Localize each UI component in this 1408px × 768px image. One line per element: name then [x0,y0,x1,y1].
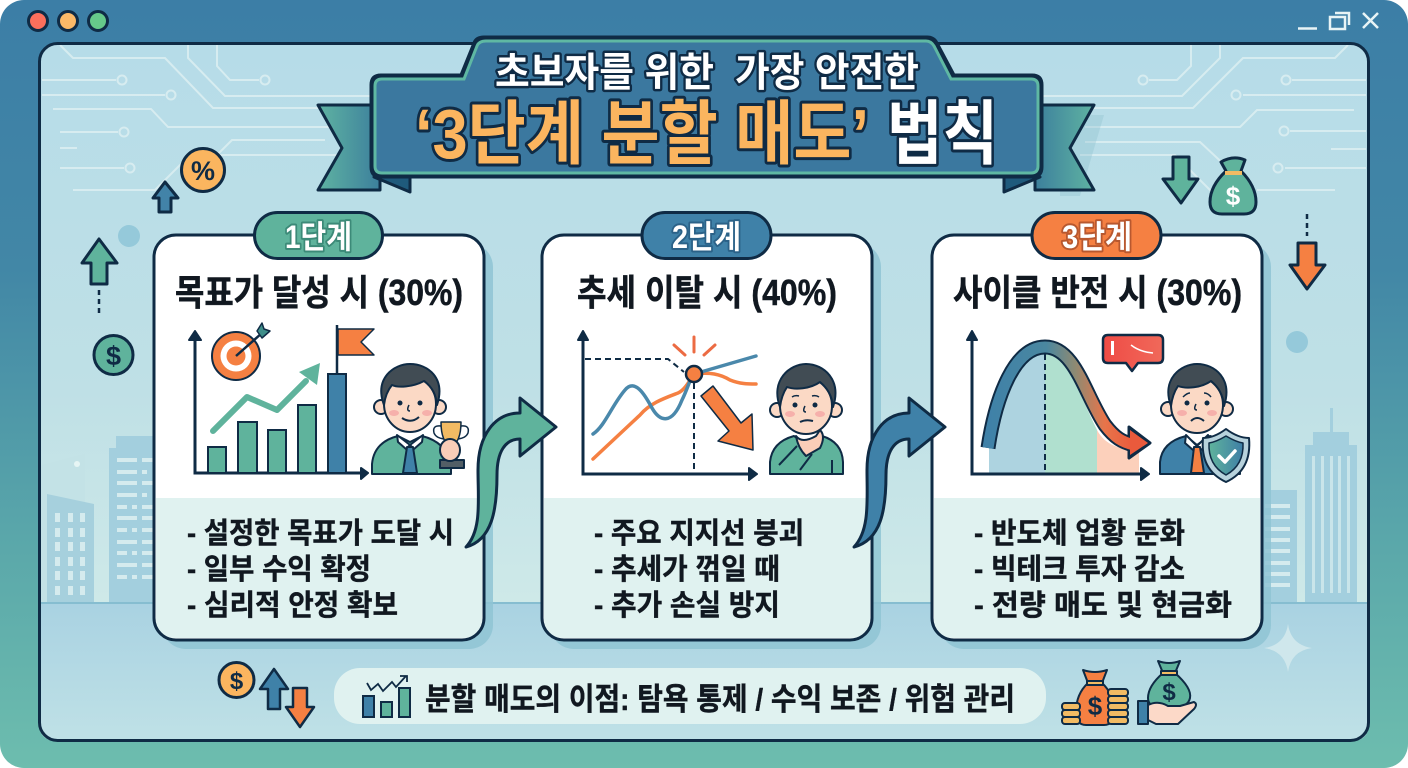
badge: step 1 [254,212,382,258]
chart: trend break lines [578,331,757,480]
character: smiling person with trophy [372,364,468,474]
icon: orange money bag with coins: $ [1088,691,1103,721]
panel: step 2 [542,212,881,649]
heading: step 1: 목표가 달성 시 (30%) [175,272,463,313]
badge: step 3: 3단계 [1062,219,1132,255]
title line 1 [495,51,919,95]
chart: rising bars with flag [189,325,374,479]
title line 2: 법칙 [887,95,998,173]
icon: green money bag [1210,158,1256,214]
background: left city skyline [41,436,156,602]
icon: hand holding green money bag [1138,661,1196,724]
window controls: minimize, restore, close [1298,13,1378,29]
panel: step 1 [154,212,493,649]
arrow: step 1 to step 2 [466,398,556,547]
icon: orange dollar coin [219,662,254,698]
icon: green down arrow [1163,157,1198,203]
heading: step 3: 사이클 반전 시 (30%) [953,272,1242,313]
icon: orange down arrow [1290,214,1325,289]
text: benefits: 분할 매도의 이점: 탐욕 통제 / 수익 보존 / 위험 관리 [425,682,1015,717]
icon: target with arrow [212,323,270,380]
title ribbon: right tail [1004,105,1104,196]
icon: green dollar coin [94,336,133,374]
icon: percent coin [182,148,224,192]
text block: step 3 bullets: - 빅테크 투자 감소 [974,553,1185,586]
badge: step 3 [1032,212,1161,258]
icon: shield with check [1203,429,1249,482]
icon: trophy [434,422,468,468]
text block: step 3 bullets: - 전량 매도 및 현금화 [974,589,1232,622]
icon: blue dot left [118,225,140,247]
background: right city skyline [1262,408,1357,602]
arrow: orange falling arrow [701,386,753,450]
icon: orange money bag with coins [1062,670,1128,725]
text block: step 1 bullets: - 심리적 안정 확보 [187,589,398,622]
character: sad person with shield [1160,364,1249,482]
character: worried person thinking [770,364,843,474]
text block: step 2 bullets: - 주요 지지선 붕괴 [594,517,804,550]
icon: percent coin: % [191,156,215,186]
window buttons: traffic lights [28,12,108,30]
icon: green up arrow [82,239,117,313]
text block: step 3 bullets [974,517,1232,622]
title line 1: 가장 안전한 [735,51,919,95]
icon: up and down arrows [260,669,314,727]
badge: step 2: 2단계 [672,219,741,255]
icon: green dollar coin: $ [106,341,121,371]
icon: red warning sign [1103,335,1163,371]
heading: step 2: 추세 이탈 시 (40%) [577,272,837,313]
icon: green money bag: $ [1226,181,1241,211]
icon: blue dot right [1286,331,1308,353]
title ribbon: left tail [318,105,410,192]
text block: step 3 bullets: - 반도체 업황 둔화 [974,517,1185,550]
text block: step 2 bullets: - 추가 손실 방지 [594,589,780,622]
icon: orange dollar coin: $ [230,668,244,695]
callout: benefits pill [334,668,1046,724]
text block: step 1 bullets: - 설정한 목표가 도달 시 [187,517,454,550]
icon: small blue up arrow [153,182,178,212]
chart: cycle reversal curve [967,331,1150,480]
icon: hand holding green money bag: $ [1162,679,1176,706]
title line 2: ‘3단계 분할 매도’ [415,95,869,173]
text block: step 1 bullets [187,517,454,622]
background: circuit lines [42,45,1366,192]
decorative sparkle [1264,624,1312,672]
arrow: step 2 to step 3 [854,398,945,547]
text block: step 2 bullets: - 추세가 꺾일 때 [594,553,780,586]
title banner [371,37,1042,177]
title line 1: 초보자를 위한 [495,51,714,95]
text block: step 1 bullets: - 일부 수익 확정 [187,553,371,586]
badge: step 1: 1단계 [285,219,352,255]
icon: mini bar chart [363,676,410,717]
text block: step 2 bullets [594,517,804,622]
badge: step 2 [642,212,771,258]
panel: step 3 [932,212,1271,649]
